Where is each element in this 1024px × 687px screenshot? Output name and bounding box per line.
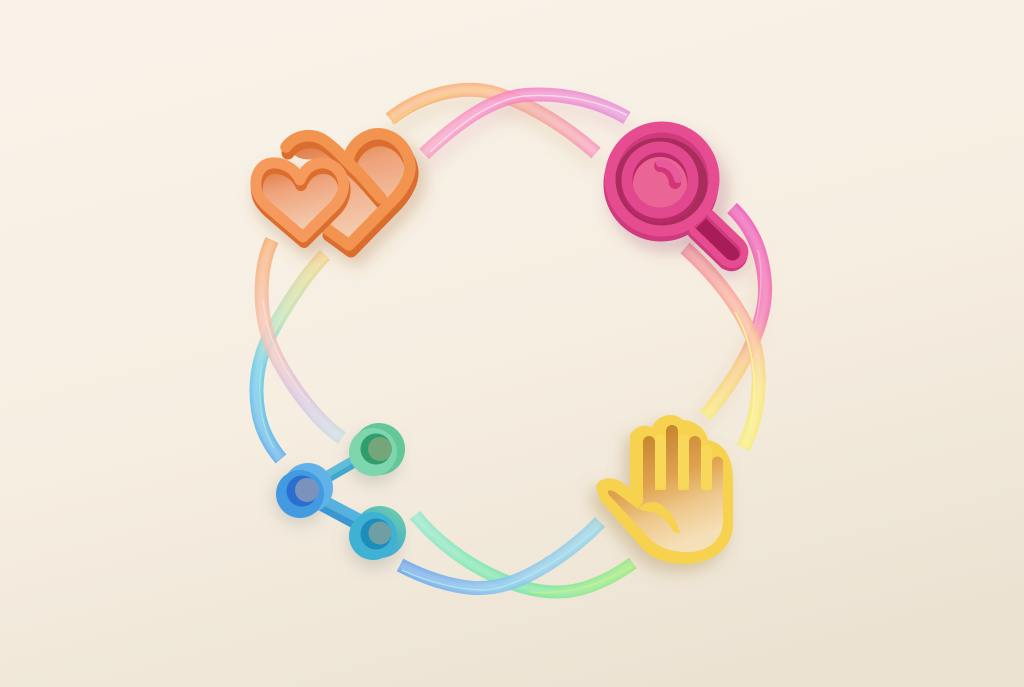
handle xyxy=(693,214,745,264)
lens highlight xyxy=(660,166,675,183)
outer ring xyxy=(609,132,713,236)
green node xyxy=(353,423,405,475)
arc: top pink xyxy=(424,94,629,166)
icon: magnifying glass xyxy=(609,127,745,272)
blue node xyxy=(283,463,333,513)
icon: share nodes xyxy=(274,423,406,568)
icon: raised hand xyxy=(590,415,733,572)
lens interior xyxy=(611,130,711,230)
icon: two hearts xyxy=(256,134,417,257)
arc: left orange to lilac xyxy=(262,240,342,438)
large heart interior xyxy=(290,134,410,245)
arc: left yellow to blue xyxy=(256,255,328,459)
large heart side walls xyxy=(288,140,412,251)
arc: right pink to yellow xyxy=(699,208,765,424)
upper link xyxy=(323,461,356,480)
arc: right coral to yellow xyxy=(685,248,759,448)
lower node xyxy=(354,506,406,558)
small heart interior xyxy=(256,163,344,237)
finger walls xyxy=(660,440,706,485)
small heart top face xyxy=(256,163,344,237)
arc: bottom blue xyxy=(400,522,600,590)
inner ring xyxy=(627,151,693,217)
small heart side wall xyxy=(257,168,345,242)
palm and finger interior xyxy=(608,425,723,552)
thumb crease xyxy=(639,502,680,533)
arc: bottom green xyxy=(415,515,633,593)
hand silhouette xyxy=(596,415,733,564)
large heart top face xyxy=(286,134,410,245)
lower link xyxy=(322,503,361,524)
arc: top orange xyxy=(390,89,598,165)
